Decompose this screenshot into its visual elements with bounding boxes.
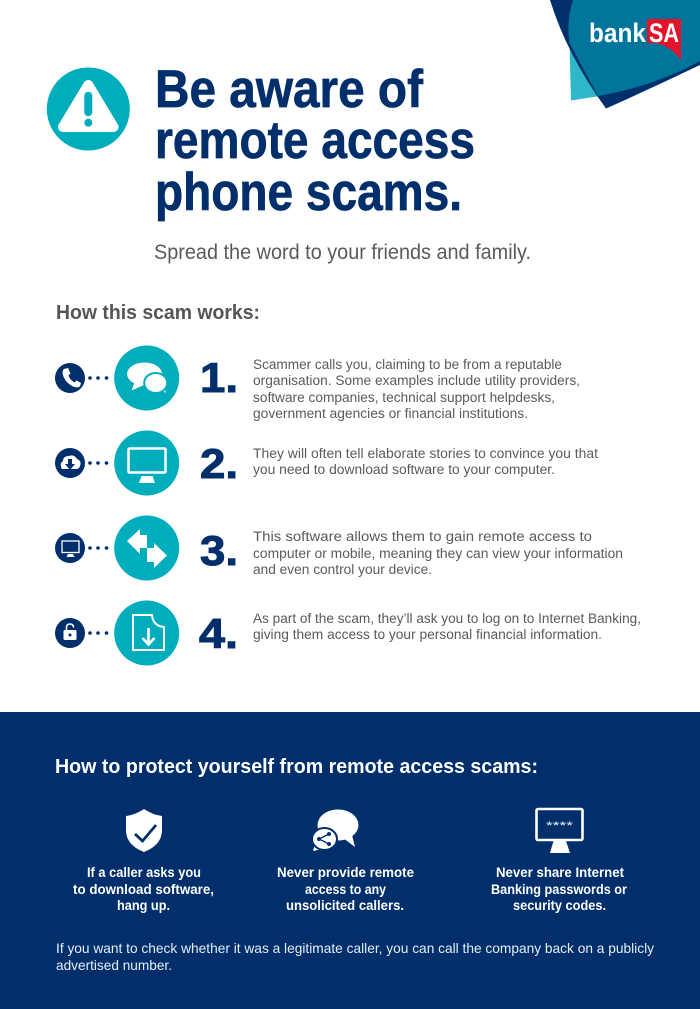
remote access text: access to any: [305, 882, 386, 897]
step 2 text: [253, 446, 598, 477]
step 3 text: and even control your device.: [253, 562, 432, 577]
hang up text: to download software,: [73, 882, 214, 897]
step 1 text: Scammer calls you, claiming to be from a reputable: [253, 357, 562, 372]
icon: swap arrows: [114, 516, 179, 580]
step 4 text: As part of the scam, they’ll ask you to log on to Internet Banking,: [253, 611, 641, 626]
step 1 text: government agencies or financial institutions.: [253, 406, 528, 421]
hang up text: hang up.: [117, 898, 170, 913]
step 2 text: you need to download software to your computer.: [253, 462, 555, 477]
icon: monitor: [114, 430, 179, 496]
step 3 text: [253, 529, 623, 577]
passwords text: Banking passwords or: [491, 882, 628, 897]
heading: how this scam works: How this scam works:: [56, 302, 260, 324]
protect heading: How to protect yourself from remote access scams:: [55, 756, 538, 778]
step 3: [55, 516, 623, 580]
column: passwords: [491, 809, 628, 913]
step 2: [55, 430, 598, 496]
step 4: [55, 600, 641, 666]
hang up text: [73, 865, 214, 913]
icon: document download: [114, 600, 179, 666]
title: Be aware of: [155, 60, 423, 119]
icon: small monitor: [55, 533, 108, 563]
icon: share bubbles: [312, 810, 358, 851]
step 4 text: giving them access to your personal financial information.: [253, 627, 602, 642]
step 1: [55, 346, 580, 421]
icon: phone: [55, 363, 108, 393]
number 1: 1.: [200, 354, 238, 401]
hang up text: If a caller asks you: [87, 865, 201, 880]
logo: bankSA: [550, 0, 700, 108]
step 1 text: organisation. Some examples include utility providers,: [253, 373, 580, 388]
icon: padlock: [55, 618, 108, 648]
number 2: 2.: [200, 440, 238, 487]
subtitle: Spread the word to your friends and family.: [154, 241, 531, 264]
logo: bankSA: SA: [649, 18, 679, 48]
step 3 text: computer or mobile, meaning they can view your information: [253, 546, 623, 561]
icon: speech bubbles: [114, 346, 179, 410]
footer note: If you want to check whether it was a legitimate caller, you can call the company back on a publicly: [56, 940, 654, 956]
step 4 text: [253, 611, 641, 642]
logo: bankSA: bank: [589, 18, 647, 48]
column: hang up: [73, 809, 214, 913]
panel: how to protect yourself: [0, 712, 700, 1009]
step 1 text: [253, 357, 580, 421]
title: [155, 60, 475, 222]
icon: cloud download: [55, 448, 108, 478]
passwords text: [491, 865, 628, 913]
step 1 text: software companies, technical support helpdesks,: [253, 390, 555, 405]
title: phone scams.: [155, 163, 462, 222]
icon: warning triangle: [47, 68, 130, 150]
icon: shield check: [126, 809, 162, 852]
passwords text: security codes.: [513, 898, 606, 913]
column: remote access: [277, 810, 414, 913]
number 4: 4.: [199, 610, 238, 657]
remote access text: [277, 865, 414, 913]
footer note: [56, 940, 654, 973]
passwords text: Never share Internet: [496, 865, 624, 880]
footer note: advertised number.: [56, 957, 172, 973]
number 3: 3.: [200, 527, 238, 574]
step 3 text: This software allows them to gain remote access to: [253, 529, 592, 544]
icon: monitor with password: ****: [546, 820, 574, 832]
title: remote access: [155, 111, 475, 170]
remote access text: Never provide remote: [277, 865, 414, 880]
remote access text: unsolicited callers.: [286, 898, 404, 913]
step 2 text: They will often tell elaborate stories to convince you that: [253, 446, 598, 461]
